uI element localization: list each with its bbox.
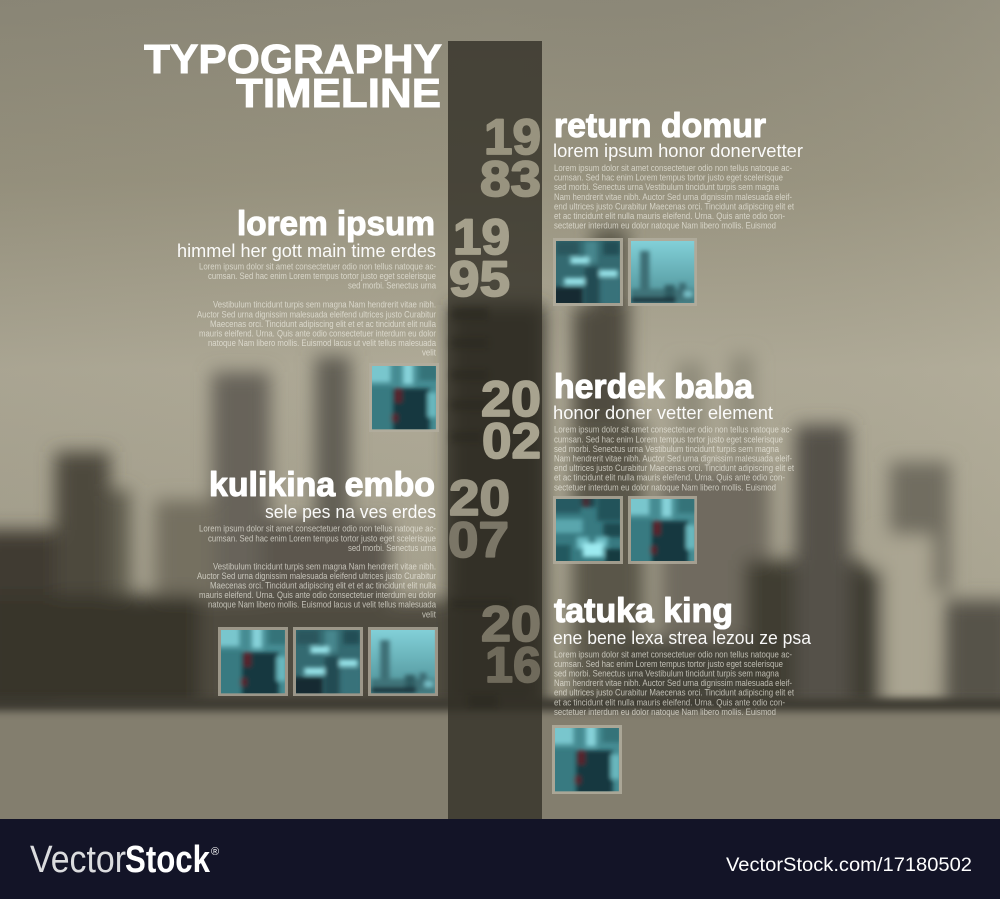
title [144,36,442,116]
body text: return domur: sectetuer interdum eu dolor natoque Nam libero mollis. Euismod [554,221,776,231]
year 2016: 20 [481,595,541,652]
year 2016: 16 [485,636,541,693]
body text: tatuka king: Nam hendrerit vitae nibh. Auctor Sed urna dignissim malesuada eleif- [554,678,792,688]
year 2002 [481,370,541,469]
photo thumbnail: lorem ipsum [368,362,440,433]
body text: kulikina embo: sed morbi. Senectus urna [348,543,436,553]
footer band [0,819,1000,899]
year 2007 [448,469,510,568]
year 1995: 95 [449,250,510,307]
panel: tatuka king [551,592,812,795]
year 1995 [449,208,510,307]
subheading: lorem ipsum: himmel her gott main time erdes [177,240,436,261]
body text: kulikina embo: Auctor Sed urna dignissim malesuada eleifend ultrices justo Curabitur [197,571,436,581]
year 1995: 19 [453,208,510,265]
body text: lorem ipsum: velit [422,348,436,358]
body text: lorem ipsum: natoque Nam libero mollis. Euismod lacus ut velit tellus malesuada [208,338,436,348]
body text: return domur: et ac tincidunt elit nulla mauris eleifend. Urna. Quis ante odio con- [554,211,785,221]
panel: lorem ipsum [177,205,440,433]
photo thumbnails: herdek baba [552,495,698,565]
body text: tatuka king: Lorem ipsum dolor sit amet consectetuer odio non tellus natoque ac- [554,649,792,659]
body text: lorem ipsum: Auctor Sed urna dignissim malesuada eleifend ultrices justo Curabitur [197,309,436,319]
body text: herdek baba: sed morbi. Senectus urna Vestibulum tincidunt turpis sem magna [554,444,779,454]
body text: lorem ipsum: mauris eleifend. Urna. Quis ante odio consectetuer interdum eu dolor [199,328,436,338]
heading: tatuka king: tatuka king [554,592,733,630]
body text: herdek baba: sectetuer interdum eu dolor natoque Nam libero mollis. Euismod [554,482,776,492]
year 2002: 20 [481,370,541,427]
body text: kulikina embo: Maecenas orci. Tincidunt adipiscing elit et et ac tincidunt elit nulla [210,580,436,590]
body text: tatuka king: sed morbi. Senectus urna Vestibulum tincidunt turpis sem magna [554,668,779,678]
body text: herdek baba: et ac tincidunt elit nulla mauris eleifend. Urna. Quis ante odio con- [554,473,785,483]
title: TYPOGRAPHY [144,36,442,82]
subheading: return domur: lorem ipsum honor donervetter [553,140,803,161]
footer logo: VectorStock: Vector [30,839,126,881]
heading: lorem ipsum: lorem ipsum [237,205,435,243]
year 1983 [480,108,541,207]
body text: kulikina embo: velit [422,609,436,619]
subheading: kulikina embo: sele pes na ves erdes [265,501,436,522]
subheading: tatuka king: ene bene lexa strea lezou ze psa [553,627,812,648]
body text: return domur: Lorem ipsum dolor sit amet consectetuer odio non tellus natoque ac- [554,163,792,173]
body text: kulikina embo: Lorem ipsum dolor sit amet consectetuer odio non tellus natoque ac- [199,524,436,534]
photo thumbnails: return domur [552,238,697,307]
year 1983: 83 [480,150,541,207]
year 1983: 19 [484,108,541,165]
body text: lorem ipsum: Vestibulum tincidunt turpis sem magna Nam hendrerit vitae nibh. [213,300,436,310]
photo thumbnail: tatuka king [551,724,623,795]
body text: return domur [554,163,794,231]
body text: return domur: Nam hendrerit vitae nibh. Auctor Sed urna dignissim malesuada eleif- [554,192,792,202]
body text: tatuka king: sectetuer interdum eu dolor natoque Nam libero mollis. Euismod [554,707,776,717]
year 2002: 02 [482,412,541,469]
body text: lorem ipsum: sed morbi. Senectus urna [348,281,436,291]
body text: kulikina embo: Vestibulum tincidunt turpis sem magna Nam hendrerit vitae nibh. [213,561,436,571]
heading: herdek baba: herdek baba [554,368,754,406]
body text: return domur: cumsan. Sed hac enim Lorem tempus tortor justo eget scelerisque [554,173,783,183]
year 2007: 07 [448,511,509,568]
subheading: herdek baba: honor doner vetter element [553,402,773,423]
body text: tatuka king: et ac tincidunt elit nulla mauris eleifend. Urna. Quis ante odio con- [554,697,785,707]
body text: herdek baba: cumsan. Sed hac enim Lorem tempus tortor justo eget scelerisque [554,434,783,444]
heading: return domur: return domur [554,107,766,145]
body text: tatuka king [554,649,794,717]
ground [0,698,1000,842]
body text: return domur: sed morbi. Senectus urna Vestibulum tincidunt turpis sem magna [554,182,779,192]
footer logo: VectorStock: Stock [125,839,211,881]
body text: kulikina embo: mauris eleifend. Urna. Quis ante odio consectetuer interdum eu dolor [199,590,436,600]
body text: herdek baba: Lorem ipsum dolor sit amet consectetuer odio non tellus natoque ac- [554,425,792,435]
body text: lorem ipsum: Lorem ipsum dolor sit amet consectetuer odio non tellus natoque ac- [199,262,436,272]
timeline vertical bar [448,41,542,819]
body text: kulikina embo [197,524,436,619]
body text: herdek baba [554,425,794,492]
body text: herdek baba: Nam hendrerit vitae nibh. Auctor Sed urna dignissim malesuada eleif- [554,454,792,464]
title: TIMELINE [236,70,441,116]
year 2016 [481,595,541,693]
body text: lorem ipsum: Maecenas orci. Tincidunt adipiscing elit et et ac tincidunt elit nulla [210,319,436,329]
year 2007: 20 [449,469,510,526]
photo thumbnails: kulikina embo [217,626,438,697]
footer logo: VectorStock: ® [211,846,219,858]
body text: kulikina embo: cumsan. Sed hac enim Lorem tempus tortor justo eget scelerisque [208,533,436,543]
panel: herdek baba [552,368,794,565]
body text: tatuka king: cumsan. Sed hac enim Lorem tempus tortor justo eget scelerisque [554,659,783,669]
footer url: VectorStock.com/17180502 [726,855,972,876]
body text: kulikina embo: natoque Nam libero mollis. Euismod lacus ut velit tellus malesuada [208,600,436,610]
body text: return domur: end ultrices justo Curabitur Maecenas orci. Tincidunt adipiscing elit et [554,201,794,211]
footer logo: VectorStock [30,839,219,881]
heading: kulikina embo: kulikina embo [209,466,435,504]
panel: kulikina embo [197,466,438,697]
building window stripes behind bar [452,308,512,707]
body text: tatuka king: end ultrices justo Curabitur Maecenas orci. Tincidunt adipiscing elit et [554,688,794,698]
body text: herdek baba: end ultrices justo Curabitur Maecenas orci. Tincidunt adipiscing elit et [554,463,794,473]
body text: lorem ipsum: cumsan. Sed hac enim Lorem tempus tortor justo eget scelerisque [208,271,436,281]
body text: lorem ipsum [197,262,436,358]
panel: return domur [552,107,803,307]
